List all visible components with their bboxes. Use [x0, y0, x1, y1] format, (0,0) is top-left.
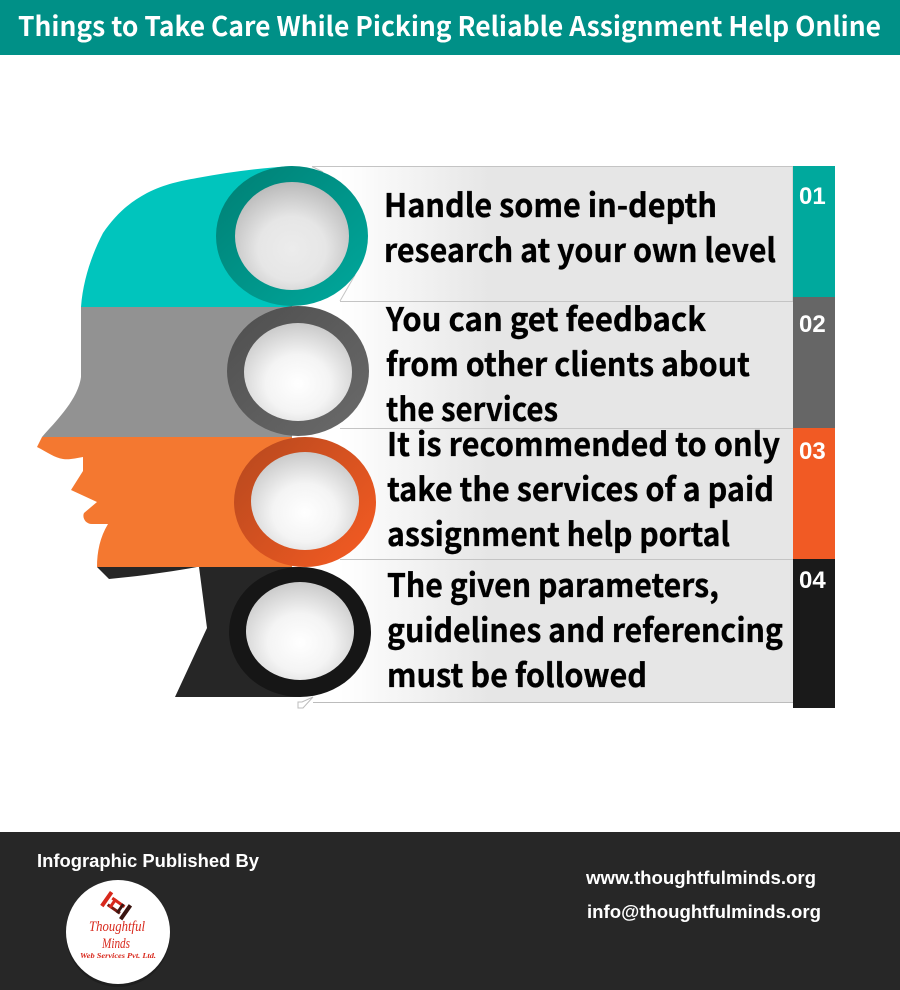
item 4 text — [387, 560, 783, 697]
website: www.thoughtfulminds.org — [585, 867, 816, 888]
item 1 text: Handle some in-depth — [384, 180, 717, 227]
logo name: Thoughtful — [89, 919, 145, 935]
item 1 text: research at your own level — [384, 225, 776, 272]
head section: gray forehead — [42, 306, 369, 437]
logo badge: Web Services Pvt. Ltd. — [80, 951, 156, 960]
head section: teal crown — [81, 166, 368, 307]
item 3 text: assignment help portal — [387, 509, 730, 556]
head section: orange face — [37, 437, 376, 567]
item 4 text: must be followed — [387, 650, 647, 697]
item 3 text — [387, 419, 780, 556]
title: Things to Take Care While Picking Reliable Assignment Help Online — [18, 5, 881, 44]
number tab 02: 02 — [799, 311, 826, 338]
email: info@thoughtfulminds.org — [587, 901, 821, 922]
number tab 03: 03 — [799, 438, 826, 465]
number tab 04 — [793, 559, 835, 708]
panel: item 4 — [298, 559, 835, 708]
item 3 text: It is recommended to only — [387, 419, 780, 466]
number tab 03 — [793, 428, 835, 559]
item 2 text — [385, 294, 750, 431]
text panel 4 — [298, 560, 793, 708]
number tab 04: 04 — [799, 567, 826, 594]
number tab 02 — [793, 297, 835, 428]
panel: item 1 — [312, 166, 835, 302]
footer heading: Infographic Published By — [37, 850, 260, 871]
head section: black chin and neck — [97, 567, 371, 697]
text panel 1 — [312, 166, 793, 302]
panel: item 2 — [312, 294, 835, 431]
item 2 text: the services — [386, 384, 558, 431]
text panel 2 — [312, 302, 793, 428]
number tab 01 — [793, 166, 835, 297]
logo badge: Minds — [101, 936, 130, 952]
item 4 text: The given parameters, — [387, 560, 719, 607]
text panel 3 — [312, 429, 793, 560]
item 3 text: take the services of a paid — [387, 464, 774, 511]
logo icon — [100, 891, 132, 920]
item 2 text: from other clients about — [386, 339, 750, 386]
head silhouette with rings — [37, 166, 376, 697]
item 2 text: You can get feedback — [385, 294, 706, 341]
number tab 01: 01 — [799, 183, 826, 210]
logo badge — [66, 880, 170, 987]
item 1 text — [384, 180, 776, 272]
item 4 text: guidelines and referencing — [387, 605, 783, 652]
panel: item 3 — [312, 419, 835, 560]
footer — [0, 832, 900, 990]
title banner — [0, 0, 900, 55]
